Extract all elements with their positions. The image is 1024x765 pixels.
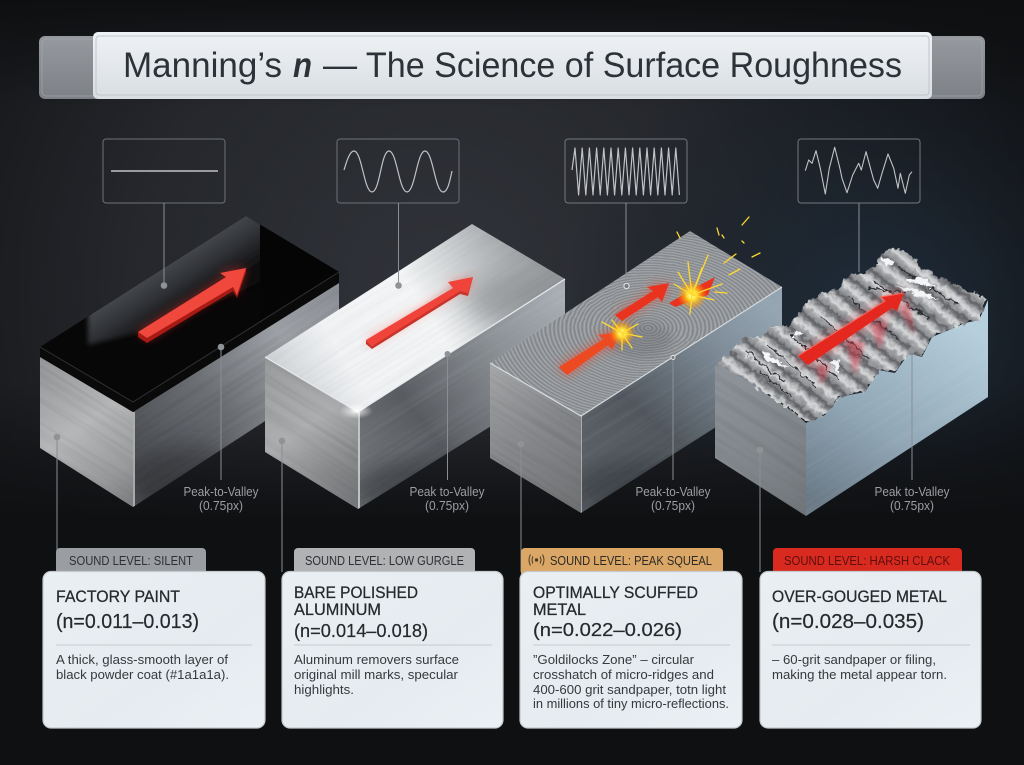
card body: Aluminum removers surface — [294, 652, 459, 667]
card body: ”Goldilocks Zone” – circular — [533, 652, 695, 667]
peak-to-valley labels: Peak-to-Valley — [636, 485, 711, 499]
card body: – 60-grit sandpaper or filing, — [772, 652, 936, 667]
sound level tab: harsh clack: SOUND LEVEL: HARSH CLACK — [784, 554, 951, 568]
card body — [43, 572, 265, 728]
icon: sound waves — [529, 554, 544, 566]
peak-to-valley labels: Peak to-Valley — [874, 485, 950, 499]
card body: FACTORY PAINT — [56, 588, 180, 606]
surface profile box 4: chaotic wave — [798, 139, 920, 203]
block 2: bare polished aluminum — [264, 224, 566, 509]
card body: (n=0.028–0.035) — [772, 611, 924, 633]
peak-to-valley labels: (0.75px) — [199, 499, 243, 513]
block 3: optimally scuffed metal — [490, 216, 782, 513]
corner specular highlight — [339, 403, 373, 419]
banner side plates — [39, 36, 985, 99]
peak-to-valley labels: (0.75px) — [425, 499, 469, 513]
red flow arrow — [138, 268, 246, 343]
sound level tab: silent — [56, 548, 206, 578]
left face — [265, 359, 358, 509]
left face — [40, 357, 133, 507]
title text: — The Science of Surface Roughness — [323, 46, 902, 85]
card body: highlights. — [294, 682, 354, 697]
card body: OVER-GOUGED METAL — [772, 588, 947, 606]
red flow arrow — [366, 277, 473, 349]
card body: METAL — [533, 601, 586, 619]
card body: crosshatch of micro-ridges and — [533, 667, 714, 682]
surface profile box 3: high-frequency wave — [565, 139, 687, 203]
title banner — [39, 32, 985, 99]
panel: over-gouged metal — [760, 548, 981, 728]
peak-to-valley labels: Peak-to-Valley — [184, 485, 259, 499]
sound level tab: peak squeal — [521, 548, 723, 578]
peak-to-valley labels: (0.75px) — [651, 499, 695, 513]
title text: Manning’s — [123, 46, 282, 85]
card body: in millions of tiny micro-reflections. — [533, 696, 729, 711]
card body — [282, 572, 503, 728]
card body — [760, 572, 981, 728]
sound level tab: silent: SOUND LEVEL: SILENT — [69, 554, 193, 568]
card body: BARE POLISHED — [294, 584, 418, 602]
card body — [520, 572, 742, 728]
sound level tab: harsh clack — [773, 548, 962, 578]
peak-to-valley labels: Peak to-Valley — [410, 485, 485, 499]
block 4: over-gouged metal — [714, 248, 988, 516]
right face — [806, 300, 988, 516]
card body: (n=0.011–0.013) — [56, 611, 199, 633]
right face — [133, 283, 339, 507]
block 1: factory paint — [40, 216, 339, 507]
peak-to-valley labels: (0.75px) — [890, 499, 934, 513]
circular crosshatch top face — [480, 225, 790, 420]
panel: optimally scuffed metal — [520, 548, 742, 728]
panel: factory paint — [43, 548, 265, 728]
red flow arrows and sparks — [559, 217, 760, 375]
right face — [358, 280, 565, 509]
card body: making the metal appear torn. — [772, 667, 947, 682]
card body: original mill marks, specular — [294, 667, 459, 682]
surface profile box 2: smooth sine — [337, 139, 459, 203]
sound level tab: low gurgle — [294, 548, 475, 578]
panel: bare polished aluminum — [282, 548, 503, 728]
card body: (n=0.014–0.018) — [294, 620, 428, 641]
polished top face — [264, 224, 566, 412]
sound level tab: peak squeal: SOUND LEVEL: PEAK SQUEAL — [550, 554, 712, 568]
card body: ALUMINUM — [294, 601, 381, 619]
title text: n — [293, 46, 312, 85]
spark bursts — [602, 217, 760, 350]
surface profile box 1: flat line — [103, 139, 225, 203]
card body: OPTIMALLY SCUFFED — [533, 584, 698, 602]
right face — [581, 288, 782, 513]
red flow arrow — [798, 293, 915, 385]
card body: (n=0.022–0.026) — [533, 619, 682, 640]
peak-to-valley labels — [184, 485, 950, 513]
left face — [490, 364, 581, 513]
sound level tab: low gurgle: SOUND LEVEL: LOW GURGLE — [305, 554, 464, 568]
banner main plate — [93, 32, 932, 99]
black powder coat top — [40, 216, 339, 412]
gashes and bright tears — [745, 256, 958, 395]
left face — [715, 365, 806, 516]
card body: 400-600 grit sandpaper, totn light — [533, 682, 726, 697]
leader lines and dots — [54, 203, 915, 572]
card body: A thick, glass-smooth layer of — [56, 652, 228, 667]
torn ridged top surface — [715, 247, 987, 423]
card body: black powder coat (#1a1a1a). — [56, 667, 229, 682]
